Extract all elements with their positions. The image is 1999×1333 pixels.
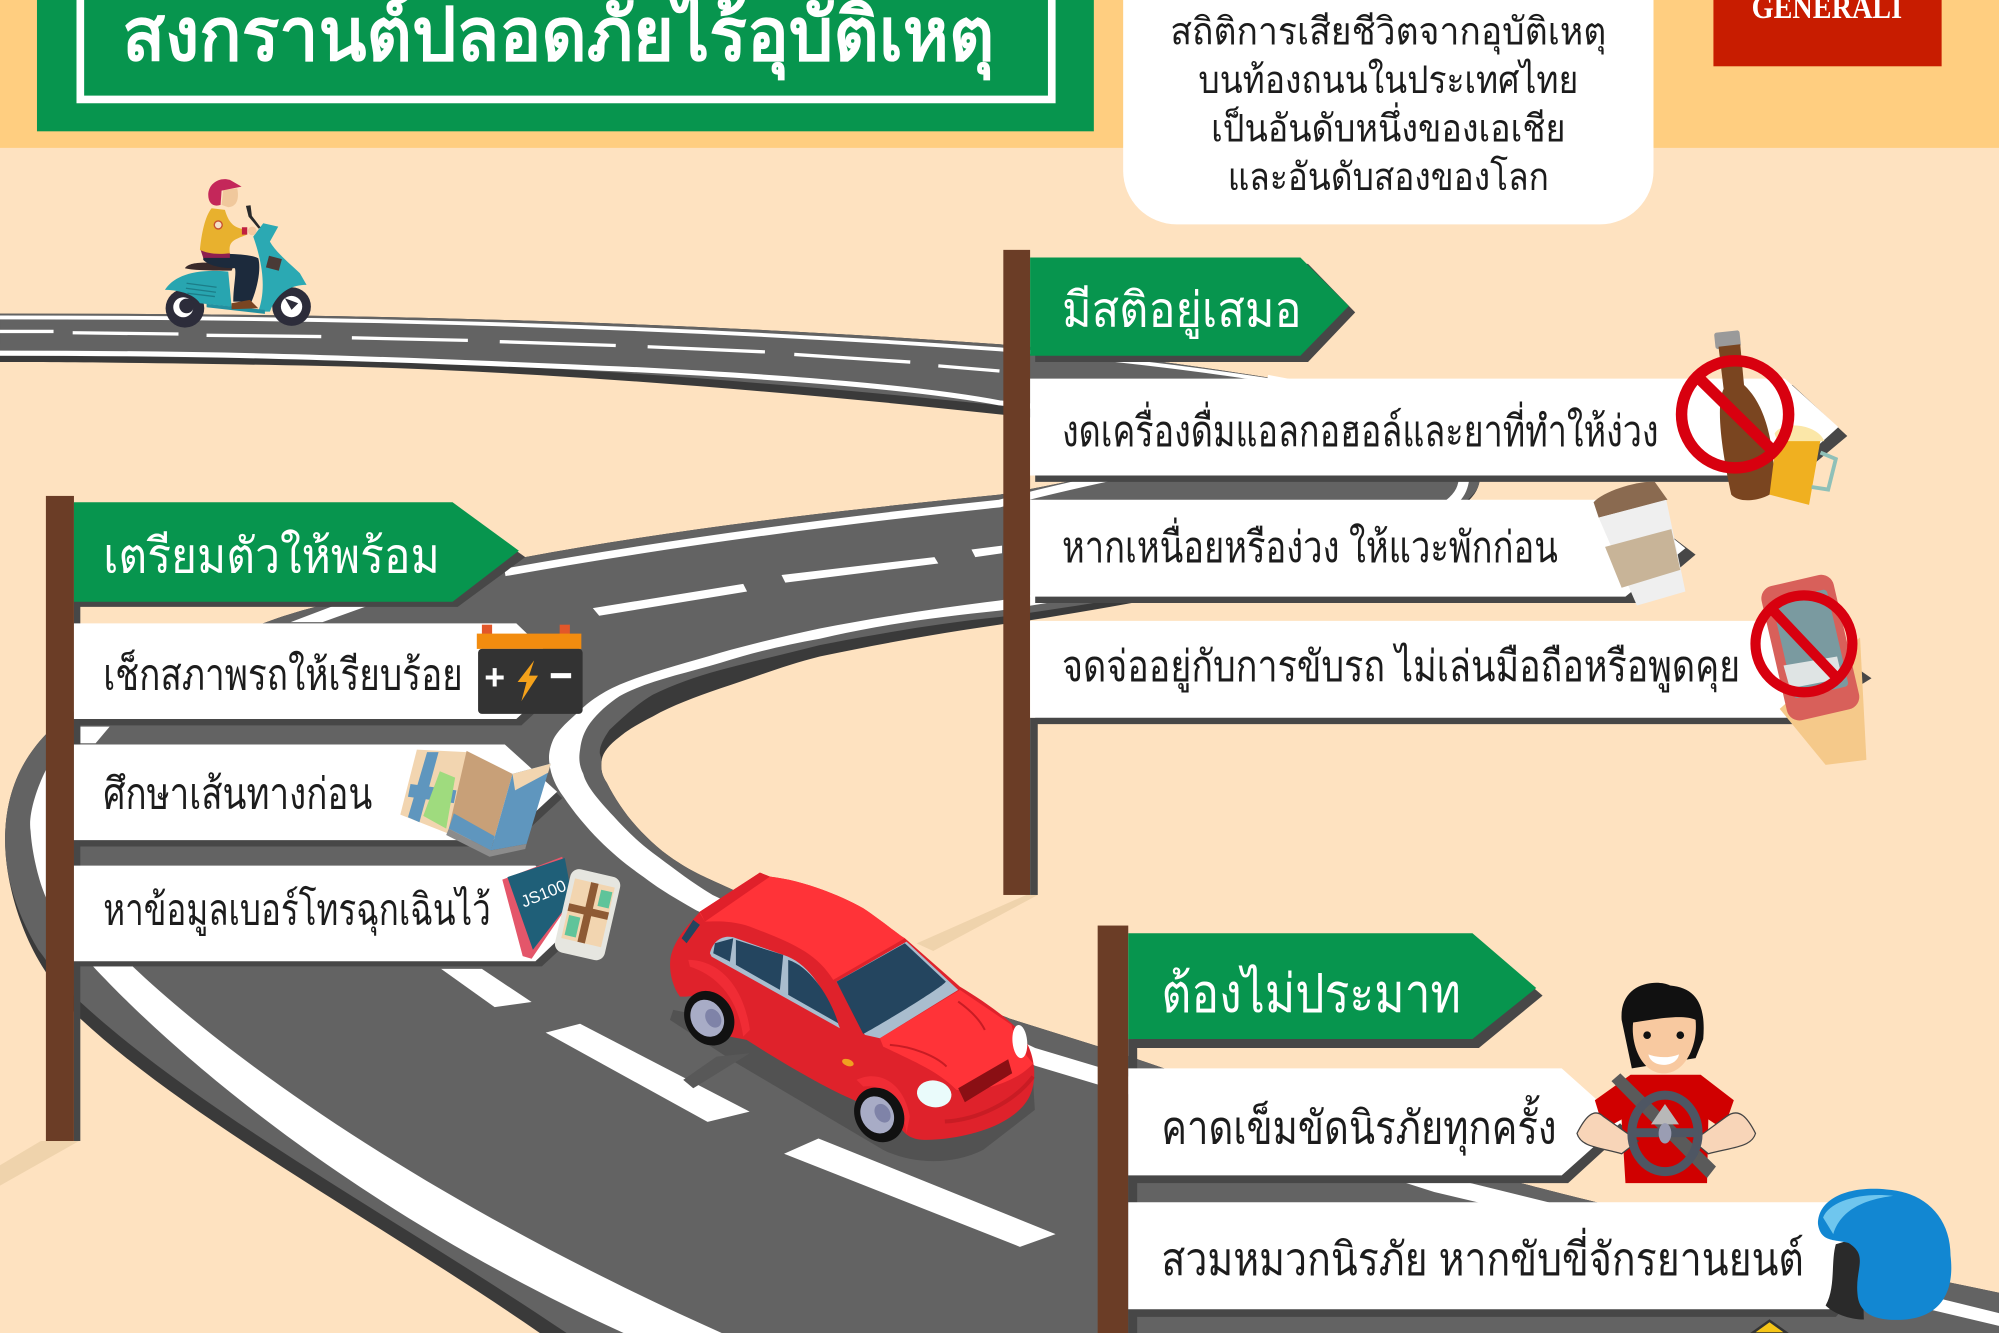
icon: driver with seat belt — [1577, 983, 1755, 1183]
upper road edge lines — [0, 317, 1464, 576]
heading sign: careful: ต้องไม่ประมาท — [1161, 964, 1461, 1024]
sign: no alcohol — [1030, 379, 1847, 482]
icon: battery: + — [484, 658, 505, 698]
heading sign: mindful: มีสติอยู่เสมอ — [1062, 283, 1302, 339]
callout: statistic bubble — [1123, 0, 1654, 224]
road — [0, 314, 1999, 1333]
phone — [553, 867, 622, 962]
upper road centre dashes — [0, 331, 1000, 371]
sign: study the route: ศึกษาเส้นทางก่อน — [103, 770, 372, 818]
signpost: prepare — [46, 496, 622, 1141]
pole ground shadows — [0, 895, 1038, 1186]
icon: helmet — [1818, 1189, 1951, 1320]
sign: rest when tired: หากเหนื่อยหรือง่วง ให้แวะพักก่อน — [1062, 517, 1558, 572]
signpost: stay mindful — [1003, 250, 1872, 895]
sign: study the route — [74, 745, 562, 847]
road white lines and lane dashes — [30, 546, 1999, 1333]
car — [670, 873, 1035, 1161]
rear wheel — [166, 289, 204, 328]
sign: check the car: เช็กสภาพรถให้เรียบร้อย — [103, 650, 463, 700]
icon: warning sign top — [1752, 1321, 1787, 1333]
heading sign: prepare — [74, 502, 525, 607]
callout: statistic bubble: บนท้องถนนในประเทศไทย — [1198, 58, 1578, 102]
sign: no phone: จดจ่ออยู่กับการขับรถ ไม่เล่นมือถือหรือพูดคุย — [1062, 641, 1740, 693]
sign: seat belt — [1128, 1068, 1627, 1183]
callout: statistic bubble: สถิติการเสียชีวิตจากอุบัติเหตุ — [1170, 11, 1606, 55]
icon: hand holding phone with no sign — [1755, 572, 1866, 765]
sign: seat belt: คาดเข็มขัดนิรภัยทุกครั้ง — [1161, 1095, 1557, 1157]
callout: statistic bubble: เป็นอันดับหนึ่งของเอเชีย — [1211, 102, 1566, 151]
signpost: don't be careless — [1098, 926, 1951, 1333]
sign: helmet — [1128, 1202, 1887, 1317]
beer mug — [1770, 425, 1836, 505]
sign: no phone — [1030, 621, 1872, 724]
icon: battery — [477, 625, 583, 714]
rear wheel — [674, 982, 744, 1055]
icon: map — [400, 750, 551, 857]
icon: contact book and phone: JS100 — [518, 876, 569, 911]
sign: emergency numbers: หาข้อมูลเบอร์โทรฉุกเฉินไว้ — [103, 884, 491, 936]
front wheel — [272, 287, 311, 326]
green title sign — [37, 0, 1094, 131]
heading sign: mindful — [1030, 258, 1355, 362]
icon: scooter and rider — [165, 179, 311, 328]
sign: helmet: สวมหมวกนิรภัย หากขับขี่จักรยานยนต์ — [1161, 1227, 1804, 1285]
sign: rest when tired — [1030, 500, 1696, 603]
callout: statistic bubble: และอันดับสองของโลก — [1228, 155, 1549, 199]
sign: no alcohol: งดเครื่องดื่มแอลกอฮอล์และยาที่ทำให้ง่วง — [1062, 401, 1659, 456]
heading sign: prepare: เตรียมตัวให้พร้อม — [103, 528, 440, 583]
icon: no alcohol — [1682, 330, 1836, 505]
icon: contact book and phone — [502, 857, 622, 962]
header band — [0, 0, 1999, 148]
sign: emergency numbers — [74, 866, 593, 966]
heading sign: careful — [1128, 933, 1543, 1048]
sign: check the car — [74, 623, 572, 725]
icon: coffee cup — [1594, 482, 1685, 606]
logo: Generali — [1713, 0, 1942, 66]
front wheel — [844, 1078, 914, 1151]
